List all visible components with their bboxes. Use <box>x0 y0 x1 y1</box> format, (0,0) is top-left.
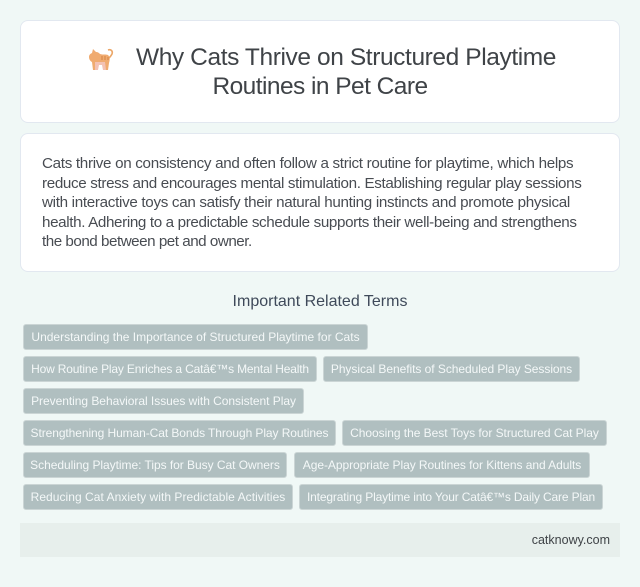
description text: health. Adhering to a predictable schedule supports their well-being and strengthens <box>42 214 577 230</box>
description text <box>42 155 582 250</box>
tag <box>23 420 336 446</box>
tag: Reducing Cat Anxiety with Predictable Activities <box>31 490 285 504</box>
tag <box>299 484 603 510</box>
tag: Age-Appropriate Play Routines for Kittens and Adults <box>303 458 581 472</box>
tag <box>23 388 304 414</box>
panel: title card <box>20 20 620 123</box>
tag <box>23 452 287 478</box>
description text: Cats thrive on consistency and often follow a strict routine for playtime, which helps <box>42 155 573 172</box>
tag: How Routine Play Enriches a Catâ€™s Mental Health <box>31 362 309 376</box>
tag <box>323 356 580 382</box>
tag <box>294 452 590 478</box>
tag: Preventing Behavioral Issues with Consistent Play <box>31 394 296 408</box>
panel: related term tags <box>23 324 607 510</box>
icon: cat <box>89 48 114 70</box>
tag <box>342 420 607 446</box>
tag: Physical Benefits of Scheduled Play Sessions <box>331 362 572 376</box>
heading: related terms: Important Related Terms <box>233 293 407 310</box>
description text: the bond between pet and owner. <box>42 233 252 250</box>
tag <box>23 484 293 510</box>
tag: Integrating Playtime into Your Catâ€™s Daily Care Plan <box>307 490 595 504</box>
footer source: catknowy.com <box>532 533 610 547</box>
title: Why Cats Thrive on Structured Playtime <box>136 44 556 71</box>
panel: description <box>20 133 620 272</box>
tag <box>23 324 368 350</box>
tag: Choosing the Best Toys for Structured Cat Play <box>350 426 599 440</box>
footer <box>20 523 620 557</box>
tag <box>23 356 317 382</box>
title <box>136 44 556 100</box>
description text: with interactive toys can satisfy their natural hunting instincts and promote physical <box>42 194 570 211</box>
tag: Understanding the Importance of Structured Playtime for Cats <box>31 330 360 344</box>
tag: Strengthening Human-Cat Bonds Through Play Routines <box>31 426 328 440</box>
description text: reduce stress and encourages mental stimulation. Establishing regular play sessions <box>42 174 582 192</box>
title: Routines in Pet Care <box>212 73 428 100</box>
tag: Scheduling Playtime: Tips for Busy Cat Owners <box>30 458 280 472</box>
